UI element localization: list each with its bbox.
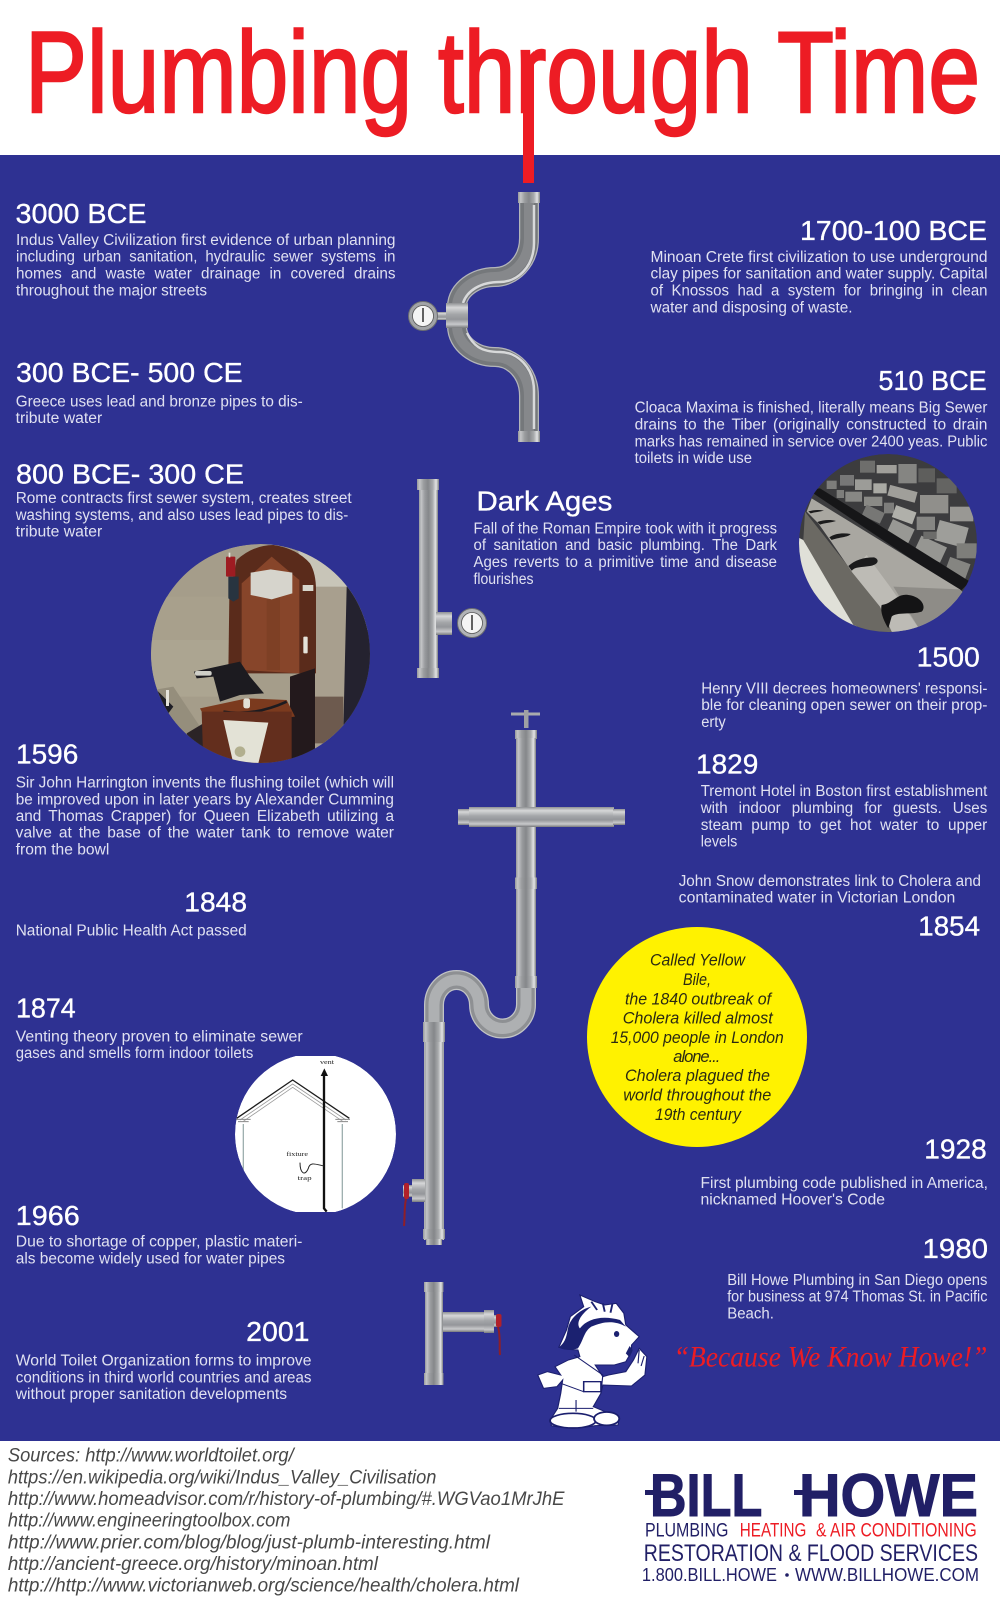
pipe: S-bend with gauge <box>408 192 540 442</box>
text: 1596: valve at the base of the water tank to remove water <box>16 825 394 842</box>
text: 1596: 1596 <box>16 738 78 769</box>
text: 1829 <box>696 748 988 851</box>
text: 1596 <box>16 738 394 858</box>
text: 1829: Tremont Hotel in Boston first establishment <box>701 783 988 800</box>
text: Dark Ages: Dark Ages <box>476 486 612 517</box>
callout: yellow cholera circle: world throughout the <box>623 1087 771 1105</box>
text: 800 BCE - 300 CE: washing systems, and also uses lead pipes to dis- <box>15 507 348 524</box>
text: 1928 <box>700 1133 988 1208</box>
text: 1829: steam pump to get hot water to upper <box>701 817 987 834</box>
logo: Bill Howe: BILL <box>650 1462 762 1529</box>
text: 2001 <box>15 1316 312 1403</box>
sources list: http://www.engineeringtoolbox.com <box>8 1511 291 1532</box>
diagram: vent and trap <box>235 1054 396 1214</box>
callout: yellow cholera circle: Bile, <box>683 971 711 989</box>
text: 1700-100 BCE: of Knossos had a system for bringing in clean <box>650 283 988 300</box>
text: 1829: with indoor plumbing for guests. Uses <box>700 800 988 817</box>
callout: yellow cholera circle: the 1840 outbreak of <box>625 990 773 1008</box>
text: 3000 BCE: Indus Valley Civilization first evidence of urban planning <box>16 232 396 249</box>
text: 510 BCE: marks has remained in service over 2400 yeas. Public <box>635 433 988 450</box>
text: 800 BCE - 300 CE: Rome contracts first sewer system, creates street <box>16 490 352 507</box>
text: 1500: ble for cleaning open sewer on their prop- <box>701 697 987 714</box>
callout: yellow cholera circle <box>587 927 807 1147</box>
text: 2001: conditions in third world countries and areas <box>16 1369 312 1386</box>
text: 2001: World Toilet Organization forms to improve <box>16 1353 312 1370</box>
text: 300 BCE - 500 CE: Greece uses lead and bronze pipes to dis- <box>16 393 303 410</box>
pipe: T branch with valve <box>424 1282 502 1385</box>
sources list: http://www.homeadvisor.com/r/history-of-plumbing/#.WGVao1MrJhE <box>8 1489 565 1510</box>
text: 1700-100 BCE: 1700-100 BCE <box>800 215 987 246</box>
text: 1848: 1848 <box>184 887 247 918</box>
icon: Bill Howe mascot <box>538 1295 647 1428</box>
diagram: vent and trap: fixture <box>286 1151 308 1158</box>
text: 1848 <box>16 887 247 939</box>
pipe: cross, trap and valve <box>403 710 625 1245</box>
text: 1966: als become widely used for water pipes <box>16 1250 285 1267</box>
callout: yellow cholera circle: Cholera killed almost <box>623 1010 774 1028</box>
sources list: http://ancient-greece.org/history/minoan.html <box>8 1554 379 1575</box>
callout: yellow cholera circle: 19th century <box>655 1106 743 1124</box>
text: 3000 BCE: homes and waste water drainage in covered drains <box>16 266 396 283</box>
text: 1500 <box>701 642 987 731</box>
text: 510 BCE: toilets in wide use <box>635 450 752 467</box>
photo: Harrington flushing toilet <box>150 543 373 763</box>
text: 3000 BCE <box>16 198 396 300</box>
text: 1854: contaminated water in Victorian London <box>679 890 955 907</box>
text: 510 BCE: Cloaca Maxima is finished, literally means Big Sewer <box>635 399 987 416</box>
text: 1928: First plumbing code published in America, <box>700 1175 988 1192</box>
text: 800 BCE - 300 CE: tribute water <box>16 524 102 541</box>
text: 1500: Henry VIII decrees homeowners' responsi- <box>701 680 987 697</box>
text: 300 BCE - 500 CE <box>16 357 303 427</box>
icon: pressure gauge <box>458 608 486 638</box>
text: 1874: 1874 <box>16 993 76 1024</box>
text: 800 BCE - 300 CE: 800 BCE- 300 CE <box>16 458 244 489</box>
sources list: http://www.prier.com/blog/blog/just-plumb-interesting.html <box>8 1532 491 1553</box>
text: 300 BCE - 500 CE: 300 BCE- 500 CE <box>16 357 243 388</box>
text: 2001: without proper sanitation developments <box>15 1386 287 1403</box>
text: 1829: 1829 <box>696 748 758 779</box>
text: Dark Ages: flourishes <box>474 571 534 588</box>
text: 1966 <box>16 1200 302 1267</box>
text: 1700-100 BCE: Minoan Crete first civilization to use underground <box>650 249 988 266</box>
icon: red valve handle <box>496 1314 502 1355</box>
text: 1596: from the bowl <box>16 841 109 858</box>
text: 1500: erty <box>701 714 726 731</box>
text: Dark Ages: of sanitation and basic plumbing. The Dark <box>474 537 777 554</box>
text: 1854 <box>679 873 981 941</box>
diagram: vent and trap: vent <box>320 1059 334 1066</box>
text: Dark Ages <box>474 486 777 588</box>
text: 1980: 1980 <box>922 1233 988 1264</box>
text: 1854: John Snow demonstrates link to Cholera and <box>679 873 981 890</box>
text: 1928: nicknamed Hoover's Code <box>700 1191 885 1208</box>
text: 1700-100 BCE: clay pipes for sanitation and water supply. Capital <box>650 266 988 283</box>
sources list <box>8 1446 565 1597</box>
sources list: Sources: http://www.worldtoilet.org/ <box>8 1446 295 1467</box>
text: 1928: 1928 <box>924 1133 987 1164</box>
text: 1874: gases and smells form indoor toilets <box>16 1045 254 1062</box>
callout: yellow cholera circle: 15,000 people in London <box>611 1029 784 1047</box>
text: 3000 BCE: 3000 BCE <box>16 198 146 229</box>
text: Dark Ages: Fall of the Roman Empire took with it progress <box>474 520 777 537</box>
text: 1966: Due to shortage of copper, plastic materi- <box>16 1234 302 1251</box>
logo: Bill Howe: 1.800.BILL.HOWE <box>642 1564 777 1585</box>
callout: yellow cholera circle: alone... <box>673 1048 720 1066</box>
text: 2001: 2001 <box>246 1316 310 1347</box>
text: 1848: National Public Health Act passed <box>16 922 247 939</box>
text: 510 BCE <box>635 365 988 467</box>
diagram: vent and trap: trap <box>298 1175 313 1182</box>
text: 3000 BCE: including urban sanitation, hydraulic sewer systems in <box>16 249 396 266</box>
photo: Roman public latrine <box>797 454 980 635</box>
logo: Bill Howe <box>642 1462 979 1585</box>
text: 1596: Sir John Harrington invents the flushing toilet (which will <box>16 774 394 791</box>
logo: Bill Howe: HOWE <box>799 1462 978 1529</box>
text: 1700-100 BCE: water and disposing of waste. <box>650 299 852 316</box>
callout: yellow cholera circle: Called Yellow <box>650 952 746 970</box>
text: 1980 <box>727 1233 988 1322</box>
text: 1700-100 BCE <box>650 215 988 316</box>
text: 510 BCE: drains to the Tiber (originally constructed to drain <box>635 416 987 433</box>
text: 1874: Venting theory proven to eliminate sewer <box>16 1028 303 1045</box>
text: 1874 <box>16 993 303 1062</box>
text: 1980: for business at 974 Thomas St. in Pacific <box>727 1289 988 1306</box>
callout: yellow cholera circle: Cholera plagued the <box>625 1067 770 1085</box>
text: Dark Ages: Ages reverts to a primitive time and disease <box>474 554 777 571</box>
red drip from title <box>523 51 534 183</box>
logo: Bill Howe: WWW.BILLHOWE.COM <box>795 1564 979 1585</box>
pipe: dark ages with gauge <box>417 479 486 678</box>
text: 1854: 1854 <box>918 910 980 941</box>
icon: red valve handle <box>404 1183 409 1226</box>
text: 1596: be improved upon in later years by Alexander Cumming <box>16 791 394 808</box>
logo: Bill Howe: PLUMBING <box>645 1520 728 1542</box>
text: 3000 BCE: throughout the major streets <box>16 283 207 300</box>
sources list: https://en.wikipedia.org/wiki/Indus_Valley_Civilisation <box>8 1467 436 1488</box>
text: 1980: Bill Howe Plumbing in San Diego opens <box>727 1272 988 1289</box>
text: 1966: 1966 <box>16 1200 80 1231</box>
text: 1980: Beach. <box>727 1305 774 1322</box>
text: 510 BCE: 510 BCE <box>878 365 987 396</box>
text: 1500: 1500 <box>917 642 980 673</box>
text: 800 BCE - 300 CE <box>15 458 352 541</box>
sources list: http://http://www.victorianweb.org/science/health/cholera.html <box>8 1576 520 1597</box>
text: 1829: levels <box>701 834 738 851</box>
logo: Bill Howe: HEATING <box>740 1520 806 1542</box>
text: 1596: and Thomas Crapper) for Queen Elizabeth utilizing a <box>16 808 394 825</box>
icon: pressure gauge <box>408 302 438 330</box>
text: 300 BCE - 500 CE: tribute water <box>16 410 102 427</box>
